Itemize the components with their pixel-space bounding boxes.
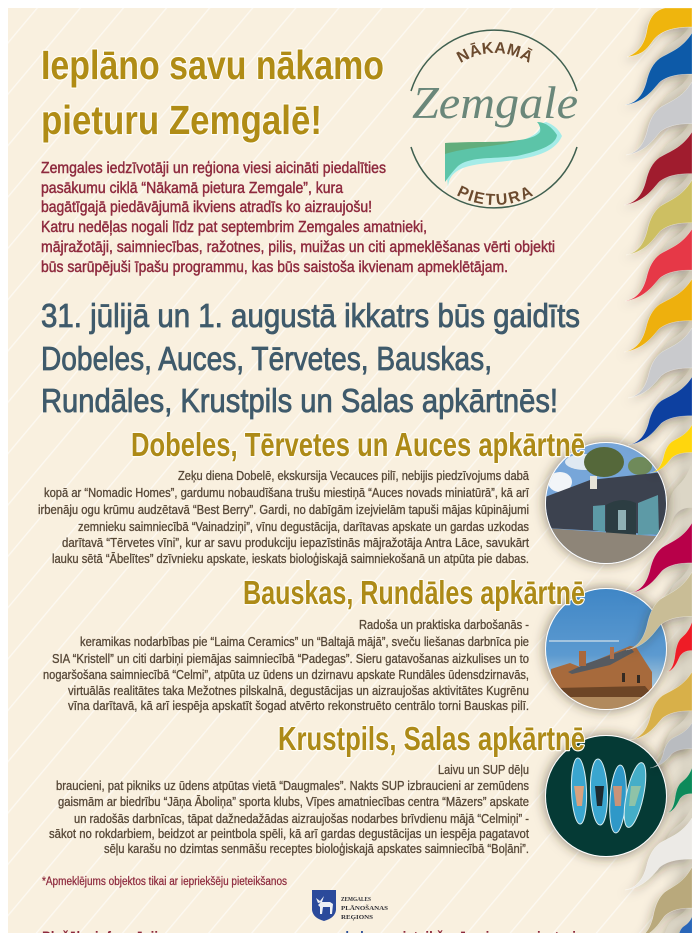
logo: Nākamā pietura Zemgale [410, 29, 578, 209]
logo: Zemgales Plānošanas Reģions [312, 890, 388, 921]
logo: Nākamā pietura Zemgale: Zemgale [412, 77, 578, 128]
section text: Dobeles: Zeķu diena Dobelē, ekskursija Vecauces pilī, nebijis piedzīvojums dabā [178, 469, 529, 483]
section text: Krustpils: sākot no rokdarbiem, beidzot ar peintbola spēli, kā arī gardas degustācijas un iespēja pagatavot [49, 827, 529, 841]
title: pieturu Zemgalē! [41, 97, 322, 143]
photo: Rundāle building [545, 588, 667, 711]
section text: Dobeles: irbenāju ogu krūmu audzētavā “Best Berry”. Gardi, no dabīgām izejvielām tapuši mājas kūpinājumi [38, 503, 529, 517]
section text: Bauskas: virtuālās realitātes taka Mežotnes pilskalnā, degustācijas un aizraujošas aktivitātes Kugrēnu [68, 684, 529, 698]
section text: Krustpils: sēļu karašu no dzimtas senmāšu receptes bioloģiskajā apskates saimniecībā “Boļāni”. [104, 842, 529, 856]
section text: Krustpils: Laivu un SUP dēļu [438, 763, 529, 777]
footnote: *Apmeklējums objektos tikai ar iepriekšēju pieteikšanos [42, 876, 287, 888]
logo: Zemgales Plānošanas Reģions: ZEMGALES [341, 896, 371, 903]
section heading: Krustpils: Krustpils, Salas apkārtnē [278, 720, 585, 757]
main heading: 31. jūlijā un 1. augustā ikkatrs būs gaidīts [41, 297, 580, 334]
section text: Bauskas: SIA “Kristell” un citi darbiņi piemājas saimniecībā “Padegas”. Sieru gatavošanas aizkulises un to [52, 652, 529, 666]
decorative colour flags [624, 8, 692, 933]
main heading: Rundāles, Krustpils un Salas apkārtnēs! [41, 382, 558, 419]
section text: Krustpils [49, 763, 529, 856]
section text: Bauskas: Radoša un praktiska darbošanās - [359, 618, 529, 632]
photo: Dobele building [545, 442, 668, 566]
logo: Nākamā pietura Zemgale: NĀKAMĀ [456, 42, 532, 63]
section text: Dobeles [38, 469, 529, 566]
main heading [41, 297, 580, 419]
intro text [41, 159, 555, 276]
intro text: mājražotāji, saimniecības, ražotnes, pilis, muižas un citi apmeklēšanas vērti objekti [41, 239, 555, 256]
logo: Zemgales Plānošanas Reģions: PLĀNOŠANAS [341, 904, 388, 912]
section text: Dobeles: kopā ar “Nomadic Homes”, gardumu nobaudīšana trušu miestiņā “Auces novads miniatūrā”, kā arī [44, 486, 529, 500]
section heading: Bauskas: Bauskas, Rundāles apkārtnē [243, 574, 585, 611]
intro text: Katru nedēļas nogali līdz pat septembrim Zemgales amatnieki, [41, 219, 427, 236]
section text: Krustpils: un radošās darbnīcas, tāpat dažnedažādas aizraujošas nodarbes brīvdienu mājā “Celmiņi” - [74, 812, 529, 826]
photo: paddle boards [545, 735, 667, 857]
title: Ieplāno savu nākamo [41, 42, 384, 88]
section text: Krustpils: braucieni, pat pikniks uz ūdens atpūtas vietā “Daugmales”. Nakts SUP izbraucieni ar zemūdens [56, 779, 529, 793]
section heading: Dobeles: Dobeles, Tērvetes un Auces apkārtnē [131, 426, 585, 463]
intro text: pasākumu ciklā “Nākamā pietura Zemgale”, kura [41, 180, 343, 197]
main heading: Dobeles, Auces, Tērvetes, Bauskas, [41, 340, 492, 377]
logo: Zemgales Plānošanas Reģions: REĢIONS [341, 914, 373, 921]
section text: Dobeles: lauku sētā “Ābelītes” dzīvnieku apskate, ieskats bioloģiskajā saimniekošanā un atpūta pie dabas. [52, 552, 529, 566]
intro text: bagātīgajā piedāvājumā ikviens atradīs ko aizraujošu! [41, 199, 372, 216]
section text: Krustpils: gaismām ar biedrību “Jāņa Āboliņa” sporta klubs, Vīpes amatniecības centra “Māzers” apskate [58, 795, 529, 809]
intro text: būs sarūpējuši īpašu programmu, kas būs saistoša ikvienam apmeklētājam. [41, 259, 508, 276]
section text: Bauskas [43, 618, 529, 713]
section text: Dobeles: zemnieku saimniecībā “Vainadziņi”, vīnu degustācija, darītavas apskate un gardas uzkodas [78, 520, 529, 534]
intro text: Zemgales iedzīvotāji un reģiona viesi aicināti piedalīties [41, 159, 386, 177]
decorative flag backing [642, 8, 692, 933]
section text: Bauskas: nogaršošana saimniecībā “Celmi”, atpūta uz ūdens un dzirnavu apskate Rundāles ūdensdzirnavās, [43, 668, 529, 682]
logo: Nākamā pietura Zemgale: PIETURA [457, 186, 534, 205]
section text: Dobeles: darītavā “Tērvetes vīni”, kur ar savu produkciju iepazīstinās mājražotāja Antra Lāce, savukārt [62, 536, 529, 550]
section text: Bauskas: keramikas nodarbības pie “Laima Ceramics” un “Baltajā mājā”, sveču liešanas darbnīca pie [80, 635, 529, 649]
title [41, 42, 384, 143]
section text: Bauskas: vīna darītavā, kā arī iespēja apskatīt šogad atvērto rekonstruēto centrālo torni Bauskas pilī. [68, 699, 529, 713]
